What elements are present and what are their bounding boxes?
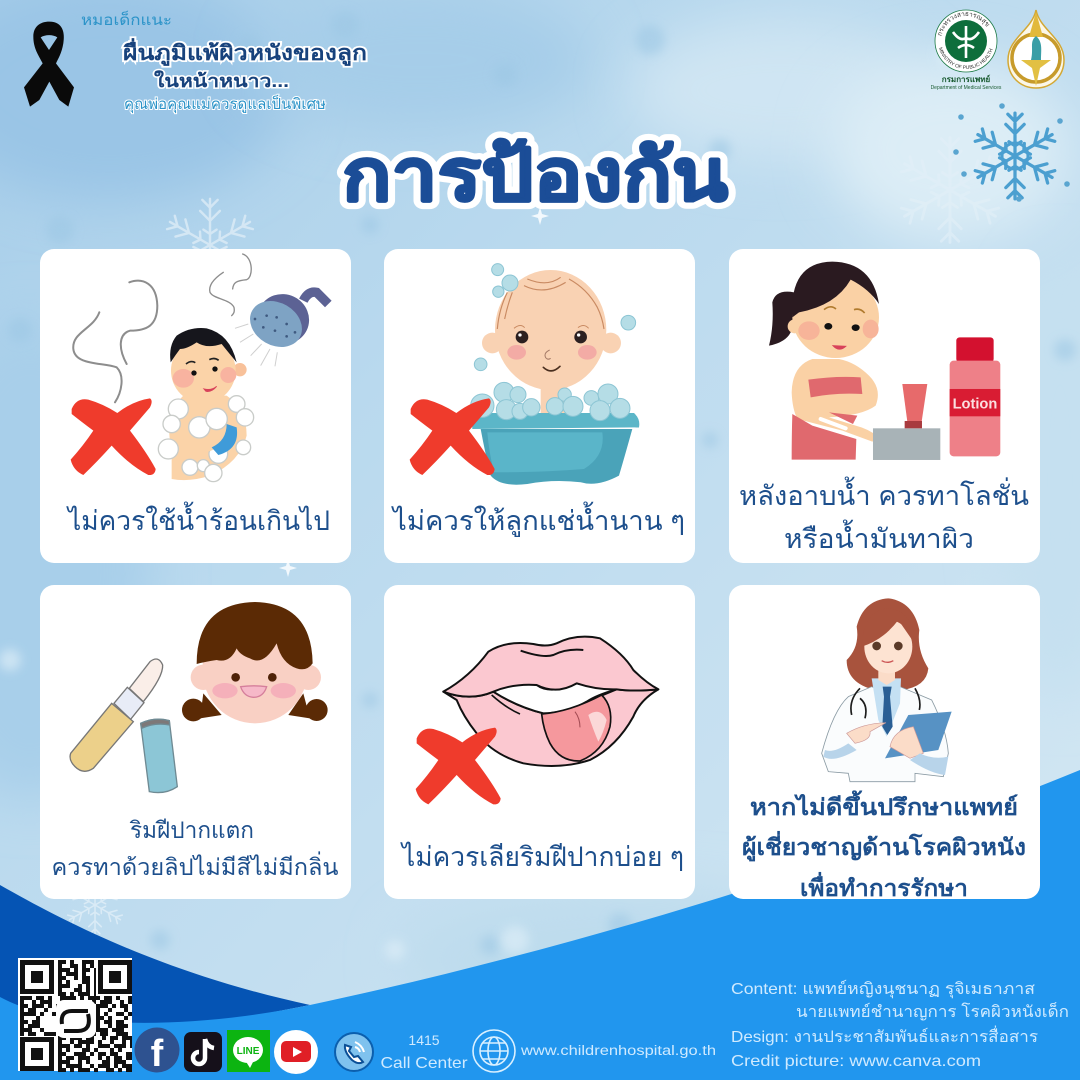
website: www.childrenhospital.go.th (520, 1043, 716, 1058)
header text (81, 10, 367, 114)
footer: light blue wave (0, 770, 1080, 1080)
panel: do not lick lips (384, 585, 695, 899)
logo: Ministry of Public Health: กรมการแพทย์ (942, 74, 991, 84)
logo: Ministry of Public Health: Department of Medical Services (931, 85, 1002, 91)
icon: youtube (274, 1030, 318, 1074)
icon: girl face (182, 602, 328, 723)
illustration: lip balm and girl (70, 602, 328, 793)
QR code (18, 958, 132, 1071)
icon: facebook: f (151, 1033, 164, 1075)
icon: line: LINE (237, 1046, 260, 1057)
credits: Content: แพทย์หญิงนุชนาฏ รุจิเมธาภาส (731, 979, 1035, 999)
panel: consult a specialist: เพื่อทำการรักษา (800, 871, 968, 901)
icon: lotion bottle (950, 337, 1000, 456)
logo: Ministry of Public Health (931, 10, 1002, 91)
panel: apply lip balm (40, 585, 351, 899)
panel: apply lotion after bathing: หรือน้ำมันทาผิว (784, 519, 974, 554)
panel: apply lip balm: ควรทาด้วยลิปไม่มีสีไม่มีกลิ่น (52, 851, 339, 880)
panel: do not soak too long (384, 249, 695, 563)
icon: bubbles (471, 264, 636, 421)
call center text: 1415 (408, 1032, 440, 1048)
icon: line (227, 1030, 270, 1072)
icon: red cross (71, 398, 156, 475)
illustration: woman applying lotion (769, 262, 1000, 460)
illustration: baby in bathtub (410, 264, 639, 485)
call center text: Call Center (380, 1055, 468, 1072)
illustration: boy under hot shower (71, 254, 328, 482)
logo: Ministry of Public Health: MINISTRY OF PUBLIC HEALTH (938, 47, 993, 69)
credits: Credit picture: www.canva.com (731, 1053, 981, 1070)
icon: lips (443, 637, 658, 766)
icon: lotion bottle: Lotion (953, 396, 997, 412)
logo: Ministry of Public Health: กระทรวงสาธารณสุข (938, 12, 990, 36)
icon: bathtub (472, 413, 639, 485)
panel: do not use very hot water (40, 249, 351, 563)
icon: red cross (416, 728, 501, 804)
caption: หลังอาบน้ำ ควรทาโลชั่น (739, 476, 1029, 511)
header title line 1: ผื่นภูมิแพ้ผิวหนังของลูก (123, 37, 367, 67)
caption: ไม่ควรให้ลูกแช่น้ำนาน ๆ (391, 501, 685, 537)
caption: หากไม่ดีขึ้นปรึกษาแพทย์ (750, 790, 1018, 820)
icon: tongue (542, 695, 611, 761)
logo: Queen Sirikit institute (1008, 10, 1064, 88)
icon: baby head (482, 270, 621, 416)
icon: red cross (410, 398, 495, 475)
header title line 2: ในหน้าหนาว... (154, 70, 289, 91)
title: การป้องกัน (342, 136, 728, 216)
kicker: หมอเด็กแนะ (81, 10, 172, 29)
icon: steam (73, 254, 251, 402)
caption: ริมฝีปากแตก (129, 817, 254, 843)
credits: นายแพทย์ชำนาญการ โรคผิวหนังเด็ก (796, 1001, 1069, 1021)
illustration: lips and tongue (416, 637, 658, 804)
call center text (380, 1032, 468, 1072)
icon: phone (335, 1033, 373, 1071)
icon: facebook (134, 1028, 180, 1075)
icon: snowflake (953, 103, 1070, 202)
icon: lipstick (70, 659, 163, 771)
icon: globe (473, 1030, 515, 1072)
footer: dark blue wave (0, 885, 310, 1040)
icon: doctor (822, 598, 952, 782)
caption: ไม่ควรเลียริมฝีปากบ่อย ๆ (400, 842, 684, 872)
icon: mourning ribbon (24, 22, 74, 107)
caption: ไม่ควรใช้น้ำร้อนเกินไป (66, 501, 330, 536)
panel: consult a specialist: ผู้เชี่ยวชาญด้านโรคผิวหนัง (742, 830, 1026, 862)
credits (731, 979, 1069, 1070)
icon: tiktok (184, 1032, 222, 1072)
icon: cream tube and stand (873, 384, 940, 460)
icon: boy in foam (158, 328, 254, 482)
credits: Design: งานประชาสัมพันธ์และการสื่อสาร (731, 1025, 1038, 1046)
title: การป้องกัน (342, 136, 728, 216)
panel: apply lotion after bathing (729, 249, 1040, 563)
icon: woman (769, 262, 879, 460)
icon: shower head (235, 286, 328, 366)
header subtitle: คุณพ่อคุณแม่ควรดูแลเป็นพิเศษ (124, 94, 326, 114)
icon: lipstick cap (141, 719, 177, 793)
panel: consult a specialist (729, 585, 1040, 901)
